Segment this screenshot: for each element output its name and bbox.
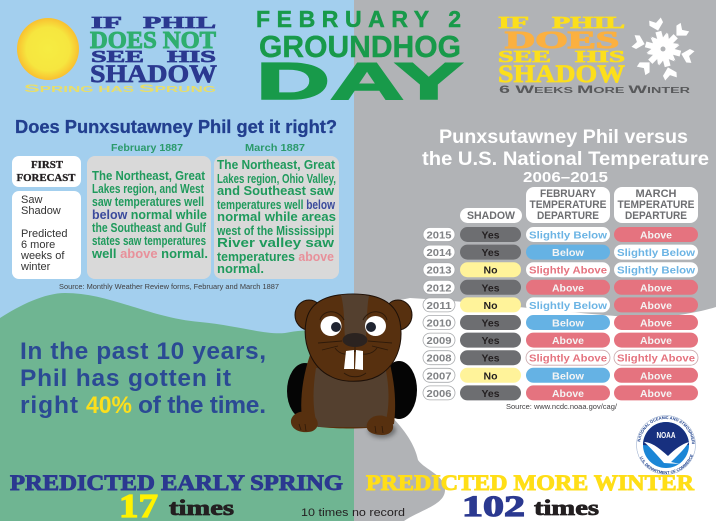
panel: if Phil does see his shadow: HIS xyxy=(575,47,625,66)
row 2014: Below xyxy=(552,247,585,259)
row 2015: Yes xyxy=(482,230,500,242)
panel: March 1887 text: temperatures above xyxy=(217,250,334,264)
panel: if Phil does see his shadow: IF xyxy=(498,13,529,32)
callout: 40 percent: Phil has gotten it xyxy=(20,365,231,392)
grey mound xyxy=(354,410,445,521)
row 2012: Yes xyxy=(482,282,500,294)
table headers: SHADOW xyxy=(467,210,516,222)
row 2009 xyxy=(423,333,698,348)
stat: 102 times: times xyxy=(534,495,600,520)
panel: first forecast details xyxy=(12,191,81,279)
row 2008: Yes xyxy=(482,353,500,365)
table headers: TEMPERATURE xyxy=(530,199,606,211)
panel: if Phil does not see his shadow: SHADOW xyxy=(90,61,217,88)
right eye xyxy=(365,316,386,336)
panel: first forecast details: Predicted xyxy=(21,228,67,240)
row 2007: No xyxy=(484,370,498,382)
row 2015 xyxy=(423,227,698,242)
panel: February 1887 text: states saw temperatures xyxy=(92,234,206,248)
row 2006 xyxy=(423,385,698,400)
row 2013: No xyxy=(484,265,498,277)
title xyxy=(256,6,463,111)
row 2014: 2014 xyxy=(426,247,452,259)
heading: February 1887: February 1887 xyxy=(111,142,183,154)
stat: 102 times xyxy=(462,490,600,521)
row 2010: Above xyxy=(640,318,672,330)
right paw xyxy=(367,415,393,435)
row 2006: Yes xyxy=(482,388,500,400)
icon: NOAA logo: NATIONAL OCEANIC AND ATMOSPHERIC ADMINISTRATION xyxy=(638,416,695,444)
row 2011: Above xyxy=(640,300,672,312)
panel: if Phil does not see his shadow xyxy=(24,13,217,95)
nose xyxy=(342,333,368,347)
row 2008 xyxy=(423,350,698,365)
row 2013: Slightly Above xyxy=(529,265,607,277)
callout: 40 percent xyxy=(20,338,266,419)
panel: March 1887 text: normal. xyxy=(217,262,264,276)
table headers: DEPARTURE xyxy=(625,210,687,222)
panel: first forecast label: FORECAST xyxy=(16,173,76,184)
panel: if Phil does not see his shadow: S PRING HAS S PRUNG xyxy=(24,83,216,95)
callout: 40 percent: of the time. xyxy=(138,392,266,419)
panel: first forecast details: weeks of xyxy=(20,250,65,262)
panel: if Phil does see his shadow xyxy=(498,13,690,96)
label: predicted early spring: PREDICTED EARLY SPRING xyxy=(10,470,343,495)
table headers: TEMPERATURE xyxy=(618,199,694,211)
row 2009: Above xyxy=(640,335,672,347)
panel: March 1887 text: normal while areas xyxy=(217,210,336,224)
source: NCDC: Source: www.ncdc.noaa.gov/cag/ xyxy=(506,402,618,411)
panel: February 1887 text: The Northeast, Great xyxy=(92,169,206,183)
heading: March 1887: March 1887 xyxy=(245,142,305,154)
row 2015: Slightly Below xyxy=(529,230,608,242)
row 2013: 2013 xyxy=(426,265,452,277)
right ear xyxy=(384,300,412,330)
row 2015: Above xyxy=(640,230,672,242)
body stripe xyxy=(314,362,388,427)
paw lines xyxy=(299,424,383,433)
title: FEBRUARY 2 xyxy=(256,6,461,32)
panel: March 1887 text: temperatures well below xyxy=(217,198,335,212)
row 2008: Slightly Above xyxy=(529,353,607,365)
row 2008: Slightly Above xyxy=(617,353,695,365)
row 2012 xyxy=(423,280,698,295)
row 2015: 2015 xyxy=(426,230,452,242)
label: predicted more winter: PREDICTED MORE WINTER xyxy=(366,470,695,495)
row 2009: 2009 xyxy=(426,335,452,347)
burrow hole right xyxy=(381,361,417,419)
row 2006: Above xyxy=(640,388,672,400)
row 2013: Slightly Below xyxy=(617,265,696,277)
panel: first forecast label xyxy=(12,156,81,187)
row 2010: 2010 xyxy=(426,318,452,330)
panel: February 1887 text xyxy=(87,156,211,279)
table headers xyxy=(460,187,698,223)
panel: March 1887 text xyxy=(214,156,339,279)
burrow hole xyxy=(287,363,323,419)
icon: snowflake xyxy=(631,17,695,81)
left eye xyxy=(320,316,342,336)
note: no record: 10 times no record xyxy=(301,507,405,519)
callout: 40 percent: In the past 10 years, xyxy=(20,338,266,365)
row 2014: Slightly Below xyxy=(617,247,696,259)
head stripe xyxy=(341,294,369,337)
row 2010 xyxy=(423,315,698,330)
background: winter side xyxy=(354,0,716,521)
panel: if Phil does see his shadow: 6 W EEKS M ORE W INTER xyxy=(499,84,690,96)
row 2011: Slightly Below xyxy=(529,300,608,312)
teeth xyxy=(344,350,363,370)
title: GROUNDHOG xyxy=(259,29,461,64)
icon: NOAA logo: U.S. DEPARTMENT OF COMMERCE xyxy=(640,454,694,474)
row 2007: Below xyxy=(552,370,585,382)
row 2012: Above xyxy=(552,282,584,294)
row 2007: 2007 xyxy=(426,370,452,382)
row 2013 xyxy=(423,262,698,277)
heading: does Phil get it right: Does Punxsutawney Phil get it right? xyxy=(15,117,337,137)
row 2011 xyxy=(423,297,698,312)
icon: NOAA logo: NOAA xyxy=(656,431,676,440)
panel: if Phil does not see his shadow: DOES NOT xyxy=(90,28,216,54)
panel: first forecast details: 6 more xyxy=(21,239,55,251)
row 2014: Yes xyxy=(482,247,500,259)
heading: Phil versus temperature: Punxsutawney Phil versus xyxy=(439,127,688,148)
stat: 17 times: times xyxy=(169,495,235,520)
panel: if Phil does see his shadow: SEE xyxy=(498,47,551,66)
row 2010: Yes xyxy=(482,318,500,330)
row 2011: No xyxy=(484,300,498,312)
green hill xyxy=(0,293,354,521)
panel: first forecast details: winter xyxy=(20,261,51,273)
panel: March 1887 text: The Northeast, Great xyxy=(217,158,336,172)
table headers: DEPARTURE xyxy=(537,210,599,222)
panel: February 1887 text: well above normal. xyxy=(91,247,208,261)
panel: February 1887 text: saw temperatures well xyxy=(92,195,204,209)
icon: sun xyxy=(17,18,79,80)
row 2014 xyxy=(423,245,698,260)
panel: February 1887 text: the Southeast and Gulf xyxy=(92,221,207,235)
table headers: FEBRUARY xyxy=(540,188,597,200)
brows xyxy=(320,312,387,320)
panel: if Phil does not see his shadow: HIS xyxy=(167,47,216,66)
panel: if Phil does not see his shadow: SEE xyxy=(91,47,144,66)
panel: first forecast details: Saw xyxy=(21,194,42,206)
panel: if Phil does see his shadow: DOES xyxy=(505,28,619,54)
title: DAY xyxy=(256,53,463,111)
panel: March 1887 text: and Southeast saw xyxy=(217,184,334,198)
left paw xyxy=(291,412,318,432)
snowy hill xyxy=(354,298,716,521)
row 2008: 2008 xyxy=(426,353,452,365)
mouth and whiskers xyxy=(318,341,392,377)
panel: March 1887 text: west of the Mississippi xyxy=(216,224,334,238)
heading: Phil versus temperature: 2006–2015 xyxy=(523,169,608,186)
icon: groundhog xyxy=(287,294,417,438)
row 2006: 2006 xyxy=(426,388,452,400)
panel: first forecast label: FIRST xyxy=(31,160,63,171)
callout: 40 percent: 40% xyxy=(86,392,132,419)
row 2007 xyxy=(423,368,698,383)
body xyxy=(301,350,395,428)
source: Monthly Weather Review: Source: Monthly Weather Review forms, February and March 1887 xyxy=(59,282,279,291)
row 2012: Above xyxy=(640,282,672,294)
heading: Phil versus temperature xyxy=(422,127,709,186)
panel: if Phil does see his shadow: SHADOW xyxy=(498,61,625,88)
heading: Phil versus temperature: the U.S. National Temperature xyxy=(422,149,709,170)
panel: March 1887 text: Lakes region, Ohio Valley, xyxy=(217,172,336,186)
row 2009: Yes xyxy=(482,335,500,347)
panel: February 1887 text: below normal while xyxy=(92,208,207,222)
row 2006: Above xyxy=(552,388,584,400)
row 2011: 2011 xyxy=(426,300,452,312)
panel: if Phil does not see his shadow: IF xyxy=(91,13,122,32)
panel: February 1887 text: Lakes region, and West xyxy=(92,182,205,196)
row 2009: Above xyxy=(552,335,584,347)
row 2007: Above xyxy=(640,370,672,382)
table headers: MARCH xyxy=(636,188,677,200)
stat: 17 times xyxy=(119,488,235,521)
left ear xyxy=(295,300,323,330)
panel: March 1887 text: River valley saw xyxy=(217,236,334,250)
panel: if Phil does see his shadow: PHIL xyxy=(552,13,625,32)
panel: if Phil does not see his shadow: PHIL xyxy=(143,13,216,32)
head xyxy=(305,294,401,381)
paw shadows xyxy=(368,422,396,438)
callout: 40 percent: right xyxy=(20,392,78,419)
background: spring side xyxy=(0,0,354,521)
row 2012: 2012 xyxy=(426,282,452,294)
panel: first forecast details: Shadow xyxy=(21,205,61,217)
row 2010: Below xyxy=(552,318,585,330)
